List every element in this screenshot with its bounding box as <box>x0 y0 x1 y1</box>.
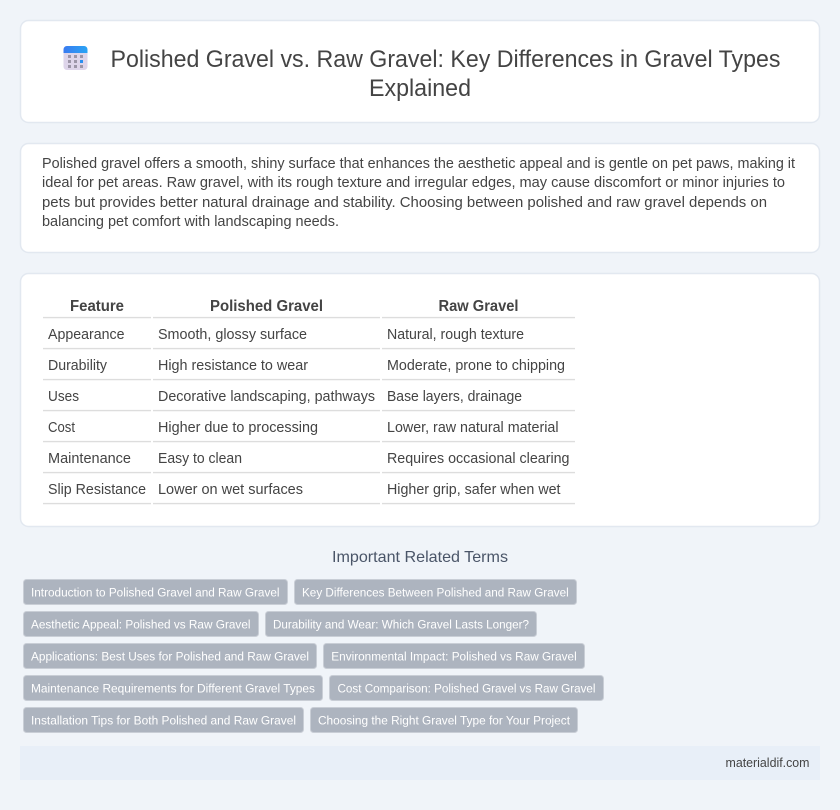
tag: Maintenance Requirements for Different Gravel Types <box>31 682 315 696</box>
tag: Environmental Impact: Polished vs Raw Gravel <box>331 650 577 664</box>
title: Polished Gravel vs. Raw Gravel: Key Differences in Gravel Types <box>110 46 780 73</box>
row: maintenance: Requires occasional clearing <box>387 451 570 467</box>
panel: introduction text: pets but provides better natural drainage and stability. Choosing between polished and raw gravel depends on <box>42 195 767 211</box>
row: durability: Durability <box>48 358 108 374</box>
row: durability: High resistance to wear <box>158 358 308 374</box>
tag: Aesthetic Appeal: Polished vs Raw Gravel <box>31 618 250 632</box>
tag <box>294 580 576 604</box>
table header: Feature <box>70 298 124 315</box>
row: durability <box>48 358 565 374</box>
tag <box>24 580 288 604</box>
heading: related terms: Important Related Terms <box>332 549 508 566</box>
tag: Choosing the Right Gravel Type for Your Project <box>318 714 571 728</box>
tag: Durability and Wear: Which Gravel Lasts Longer? <box>273 618 529 632</box>
panel: introduction text: ideal for pet areas. Raw gravel, with its rough texture and irregular edges, may cause discomfort or minor injuries to <box>42 175 785 191</box>
tag: Key Differences Between Polished and Raw Gravel <box>302 586 569 600</box>
panel: comparison table <box>20 274 820 526</box>
tag: Introduction to Polished Gravel and Raw Gravel <box>31 586 280 600</box>
tag: Cost Comparison: Polished Gravel vs Raw Gravel <box>338 682 596 696</box>
row: appearance: Natural, rough texture <box>387 327 524 343</box>
row: slip resistance: Slip Resistance <box>48 482 146 498</box>
title: Explained <box>369 75 471 102</box>
row: slip resistance <box>48 482 560 498</box>
panel: introduction text: balancing pet comfort with landscaping needs. <box>42 214 339 230</box>
tag <box>324 644 584 668</box>
tag <box>24 708 304 732</box>
tag <box>266 612 536 636</box>
tag <box>24 612 258 636</box>
tag <box>330 676 604 700</box>
row: cost: Higher due to processing <box>158 420 318 436</box>
row: slip resistance: Lower on wet surfaces <box>158 482 303 498</box>
row: appearance: Smooth, glossy surface <box>158 327 307 343</box>
icon: calendar <box>64 46 88 70</box>
row: cost: Cost <box>48 420 75 436</box>
title <box>110 46 780 102</box>
panel: introduction text: Polished gravel offers a smooth, shiny surface that enhances the aesthetic appeal and is gentle on pet paws, making it <box>42 156 795 172</box>
row: uses: Uses <box>48 389 79 405</box>
row: maintenance: Easy to clean <box>158 451 242 467</box>
footer <box>20 746 820 780</box>
row: uses <box>48 389 522 405</box>
row: maintenance: Maintenance <box>48 451 131 467</box>
row: cost <box>48 420 558 436</box>
related term tags <box>24 580 604 732</box>
tag <box>24 676 322 700</box>
row: cost: Lower, raw natural material <box>387 420 558 436</box>
table header: Raw Gravel <box>438 298 518 315</box>
row: uses: Decorative landscaping, pathways <box>158 389 375 405</box>
tag <box>310 708 578 732</box>
table header <box>70 298 518 315</box>
row: slip resistance: Higher grip, safer when wet <box>387 482 560 498</box>
row: appearance <box>48 327 524 343</box>
tag <box>24 644 316 668</box>
row: appearance: Appearance <box>48 327 124 343</box>
row: maintenance <box>48 451 570 467</box>
row: durability: Moderate, prone to chipping <box>387 358 565 374</box>
tag: Applications: Best Uses for Polished and Raw Gravel <box>31 650 309 664</box>
panel: introduction text <box>20 144 820 252</box>
panel: header <box>20 20 820 122</box>
tag: Installation Tips for Both Polished and Raw Gravel <box>31 714 296 728</box>
footer: materialdif.com <box>726 756 810 770</box>
row: uses: Base layers, drainage <box>387 389 522 405</box>
table header: Polished Gravel <box>210 298 323 315</box>
